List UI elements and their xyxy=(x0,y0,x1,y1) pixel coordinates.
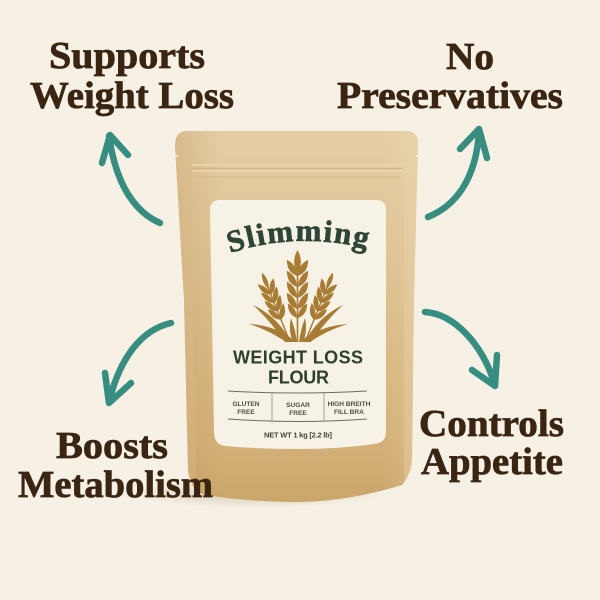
heading: boosts metabolism: Metabolism xyxy=(18,464,213,506)
heading: boosts metabolism: Boosts xyxy=(56,425,168,467)
heading: controls appetite xyxy=(419,403,564,483)
heading: no preservatives xyxy=(337,36,563,117)
bag shadow xyxy=(130,480,380,508)
attribute 2: FREE xyxy=(289,410,307,417)
arrow: no preservatives xyxy=(428,129,487,217)
product pouch xyxy=(175,131,418,502)
arrow: controls appetite xyxy=(425,312,497,386)
attribute 3: HIGH BREITH xyxy=(328,401,370,408)
left ear xyxy=(254,269,298,345)
side seal left xyxy=(175,131,196,490)
arrow: boosts metabolism xyxy=(105,323,171,403)
attribute 3: FILL BRA xyxy=(334,409,364,416)
right ear xyxy=(297,269,341,345)
center ear xyxy=(287,250,308,342)
heading: no preservatives: Preservatives xyxy=(337,75,563,117)
brand name: Slimming xyxy=(227,220,370,254)
pouch side shading xyxy=(175,131,418,502)
tear notch right xyxy=(416,155,420,156)
wheat illustration xyxy=(249,250,348,345)
side seal right xyxy=(404,131,418,480)
attribute 2: SUGAR xyxy=(286,402,310,409)
net weight: NET WT 1 kg [2.2 lb] xyxy=(264,430,332,440)
heading: controls appetite: Controls xyxy=(419,403,564,445)
arrow: supports weight loss xyxy=(102,135,160,223)
heading: no preservatives: No xyxy=(446,36,494,78)
product title line 2: FLOUR xyxy=(268,368,329,388)
zip seal xyxy=(192,165,402,177)
attribute 1: FREE xyxy=(237,409,255,416)
tear notch left xyxy=(174,155,178,156)
pouch body xyxy=(175,131,418,502)
heading: controls appetite: Appetite xyxy=(421,441,563,483)
product title line 1: WEIGHT LOSS xyxy=(233,348,363,368)
attribute 1: GLUTEN xyxy=(232,401,260,408)
label xyxy=(210,200,386,449)
heading: boosts metabolism xyxy=(18,425,213,506)
heading: supports weight loss: Supports xyxy=(49,35,205,77)
heading: supports weight loss xyxy=(30,35,234,117)
attribute table xyxy=(228,391,371,422)
leaves xyxy=(249,305,348,342)
heading: supports weight loss: Weight Loss xyxy=(30,75,234,117)
